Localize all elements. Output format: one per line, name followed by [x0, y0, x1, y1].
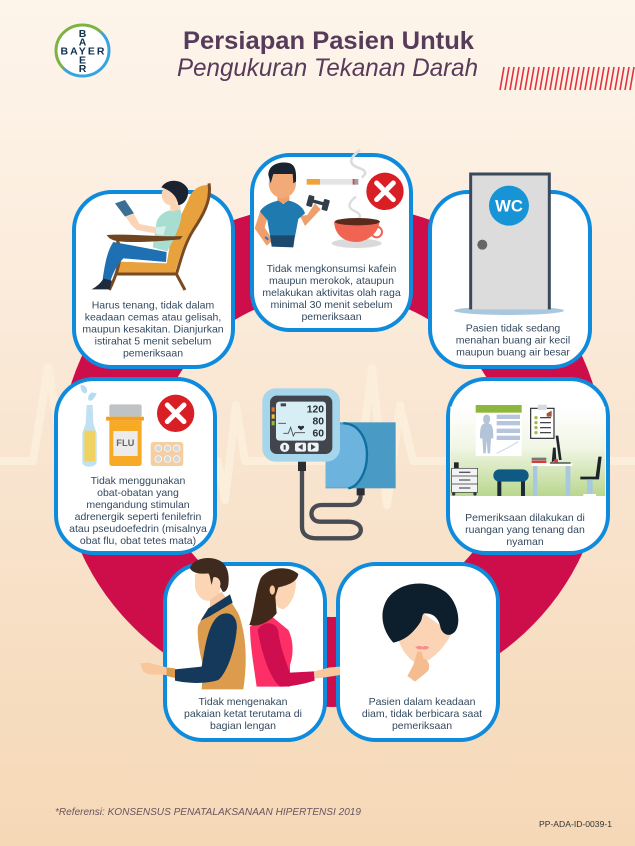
icon: blood pressure monitor: 80: [312, 417, 324, 428]
illustration: man and woman back to back: [140, 558, 340, 689]
panel: no caffeine, smoking or exercise: [252, 150, 411, 330]
caption: mengandung stimulan: [86, 499, 190, 511]
caption: maupun kesakitan. Dianjurkan: [82, 324, 224, 336]
caption: maupun buang air besar: [456, 346, 570, 358]
background heartbeat line: [0, 367, 635, 505]
caption: ruangan yang tenang dan: [465, 524, 585, 536]
caption: melakukan aktivitas olah raga: [262, 287, 401, 299]
illustration: person reading in armchair: [92, 181, 209, 290]
caption: obat-obatan yang: [97, 487, 179, 499]
logo: Bayer: R: [79, 63, 87, 75]
illustration: face with finger on lips: [382, 584, 458, 682]
reference note: *Referensi: KONSENSUS PENATALAKSANAAN HIPERTENSI 2019: [55, 806, 361, 818]
caption: nyaman: [506, 536, 544, 548]
caption: keadaan cemas atau gelisah,: [85, 312, 221, 324]
caption: Pasien dalam keadaan: [369, 696, 476, 708]
icon: blood pressure monitor: 120: [307, 405, 324, 416]
title: [177, 27, 478, 82]
caption: adrenergik seperti fenilefrin: [75, 511, 201, 523]
document code: PP-ADA-ID-0039-1: [539, 820, 613, 829]
caption: atau pseudoefedrin (misalnya: [69, 523, 207, 535]
caption: Tidak mengenakan: [199, 696, 288, 708]
panel: rest before measurement: [74, 181, 233, 367]
caption: minimal 30 menit sebelum: [271, 299, 393, 311]
caption: pemeriksaan: [392, 720, 452, 732]
illustration: man with dumbbell, cigarette and coffee: [255, 150, 404, 248]
icon: blood pressure monitor: 60: [312, 429, 324, 440]
icon: blood pressure monitor: [262, 388, 396, 538]
caption: Harus tenang, tidak dalam: [92, 300, 215, 312]
illustration: medicines: [81, 385, 194, 467]
caption: Pasien tidak sedang: [466, 322, 560, 334]
caption: diam, tidak berbicara saat: [362, 708, 482, 720]
title: Pengukuran Tekanan Darah: [177, 54, 478, 82]
panel: no stimulant medicines: [56, 379, 215, 553]
caption: Pemeriksaan dilakukan di: [465, 512, 585, 524]
caption: istirahat 5 menit sebelum: [95, 336, 212, 348]
caption: Tidak mengkonsumsi kafein: [267, 263, 397, 275]
logo: Bayer: [56, 25, 109, 76]
panel: no tight clothing: [140, 558, 340, 740]
red ring: [60, 203, 604, 707]
title: Persiapan Pasien Untuk: [183, 27, 474, 55]
logo: Bayer: A: [79, 36, 87, 48]
caption: maupun merokok, ataupun: [269, 275, 394, 287]
logo: Bayer: BAYER: [60, 46, 105, 58]
caption: pemeriksaan: [123, 348, 183, 360]
logo: Bayer: B: [79, 28, 87, 40]
caption: pemeriksaan: [301, 311, 362, 323]
illustration: medicines: FLU: [116, 438, 135, 448]
panel: stay silent: [338, 564, 498, 740]
panel: toilet need: [430, 174, 590, 367]
caption: bagian lengan: [210, 720, 276, 732]
illustration: WC door: WC: [495, 197, 523, 216]
caption: pakaian ketat terutama di: [184, 708, 302, 720]
panel: quiet room: [448, 379, 608, 553]
decorative red stripes: [500, 67, 634, 90]
caption: menahan buang air kecil: [456, 334, 570, 346]
illustration: examination room: [450, 405, 605, 496]
caption: obat flu, obat tetes mata): [80, 535, 196, 547]
illustration: WC door: [454, 174, 564, 315]
caption: Tidak menggunakan: [91, 475, 186, 487]
logo: Bayer: E: [79, 54, 86, 66]
